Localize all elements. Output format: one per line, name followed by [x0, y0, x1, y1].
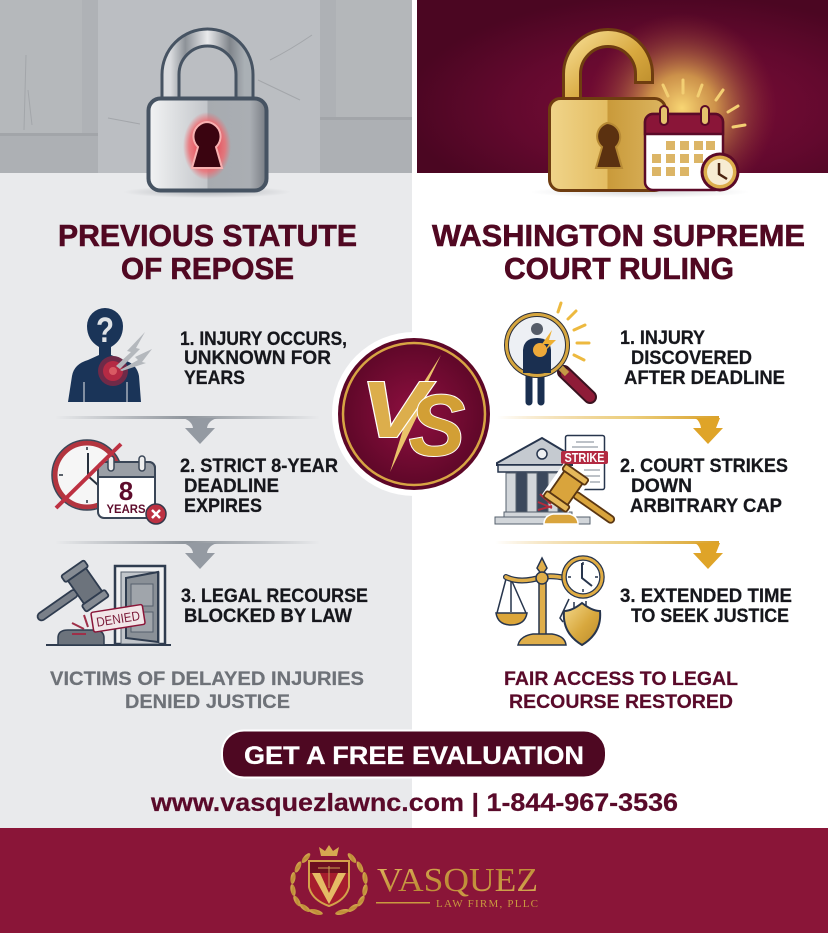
heading: right column: WASHINGTON SUPREME — [432, 219, 805, 253]
icon: person with hidden injury: ? — [96, 311, 114, 350]
logo: wordmark: LAW FIRM, PLLC — [436, 898, 538, 910]
step 3 left text: 3. LEGAL RECOURSE — [181, 585, 368, 607]
step 1 left text — [180, 328, 347, 389]
icon: light rays — [663, 80, 745, 127]
icon: magnifying glass on injury — [506, 303, 590, 402]
panel: left header with padlock — [0, 0, 412, 198]
VS badge: V — [360, 365, 435, 454]
step 1 right text — [620, 327, 785, 389]
step 2 right text: 2. COURT STRIKES — [620, 455, 788, 477]
call to action button: GET A FREE EVALUATION — [244, 742, 584, 770]
step 3 right text — [620, 585, 792, 627]
step 1 left text: UNKNOWN FOR — [184, 347, 331, 369]
icon: calendar with clock — [645, 106, 740, 192]
heading: left column: PREVIOUS STATUTE — [58, 219, 357, 253]
logo: wordmark: VASQUEZ — [377, 862, 538, 899]
left conclusion text: VICTIMS OF DELAYED INJURIES — [50, 668, 364, 690]
step 2 left text: DEADLINE — [184, 475, 279, 497]
icon: closed padlock — [123, 38, 291, 198]
call to action button — [222, 730, 606, 778]
step 3 left text — [181, 585, 368, 627]
step 2 right text — [620, 455, 788, 517]
step 1 left text: 1. INJURY OCCURS, — [180, 328, 347, 350]
contact line: www.vasquezlawnc.com | 1-844-967-3536 — [150, 789, 678, 817]
icon: court, strike document and gavel: STRIKE — [564, 451, 604, 465]
step 2 right text: ARBITRARY CAP — [630, 495, 782, 517]
step 2 left text: EXPIRES — [184, 495, 262, 517]
right conclusion text: RECOURSE RESTORED — [509, 691, 733, 713]
heading: left column: OF REPOSE — [121, 252, 294, 286]
step 3 left text: BLOCKED BY LAW — [184, 605, 353, 627]
icon: expired clock and 8 years calendar — [52, 440, 166, 524]
step 1 right text: DISCOVERED — [631, 347, 752, 369]
footer band — [0, 828, 828, 933]
heading: right column: COURT RULING — [504, 252, 734, 286]
logo: crest — [289, 845, 369, 916]
icon: gavel, door and denied stamp: DENIED — [95, 608, 141, 630]
step 1 right text: AFTER DEADLINE — [624, 367, 785, 389]
right conclusion text — [504, 668, 738, 713]
arrow: left step 2 to 3 — [55, 541, 320, 569]
icon: court, strike document and gavel — [495, 436, 625, 538]
step 2 left text: 2. STRICT 8-YEAR — [180, 455, 338, 477]
icon: scales, clock and shield — [496, 558, 602, 645]
step 1 right text: 1. INJURY — [620, 327, 705, 349]
arrow: right step 1 to 2 — [497, 416, 723, 444]
right conclusion text: FAIR ACCESS TO LEGAL — [504, 668, 738, 690]
panel: right header with open padlock — [417, 0, 828, 203]
panel: left background — [0, 173, 412, 828]
step 3 right text: 3. EXTENDED TIME — [620, 585, 792, 607]
left conclusion text — [50, 668, 364, 713]
arrow: left step 1 to 2 — [55, 416, 320, 444]
arrow: right step 2 to 3 — [495, 541, 723, 569]
step 3 right text: TO SEEK JUSTICE — [631, 605, 789, 627]
left conclusion text: DENIED JUSTICE — [125, 691, 290, 713]
icon: open gold padlock — [530, 38, 750, 198]
VS badge — [332, 332, 496, 496]
icon: expired clock and 8 years calendar: 8 — [119, 476, 133, 506]
icon: expired clock and 8 years calendar: YEARS — [106, 502, 146, 516]
step 2 right text: DOWN — [631, 475, 692, 497]
step 1 left text: YEARS — [184, 367, 245, 389]
step 2 left text — [180, 455, 338, 517]
heading: right column — [432, 219, 805, 286]
panel: right background — [412, 173, 828, 828]
icon: person with hidden injury — [68, 308, 152, 402]
VS badge: S — [409, 378, 465, 474]
icon: gavel, door and denied stamp — [26, 560, 171, 645]
heading: left column — [58, 219, 357, 286]
